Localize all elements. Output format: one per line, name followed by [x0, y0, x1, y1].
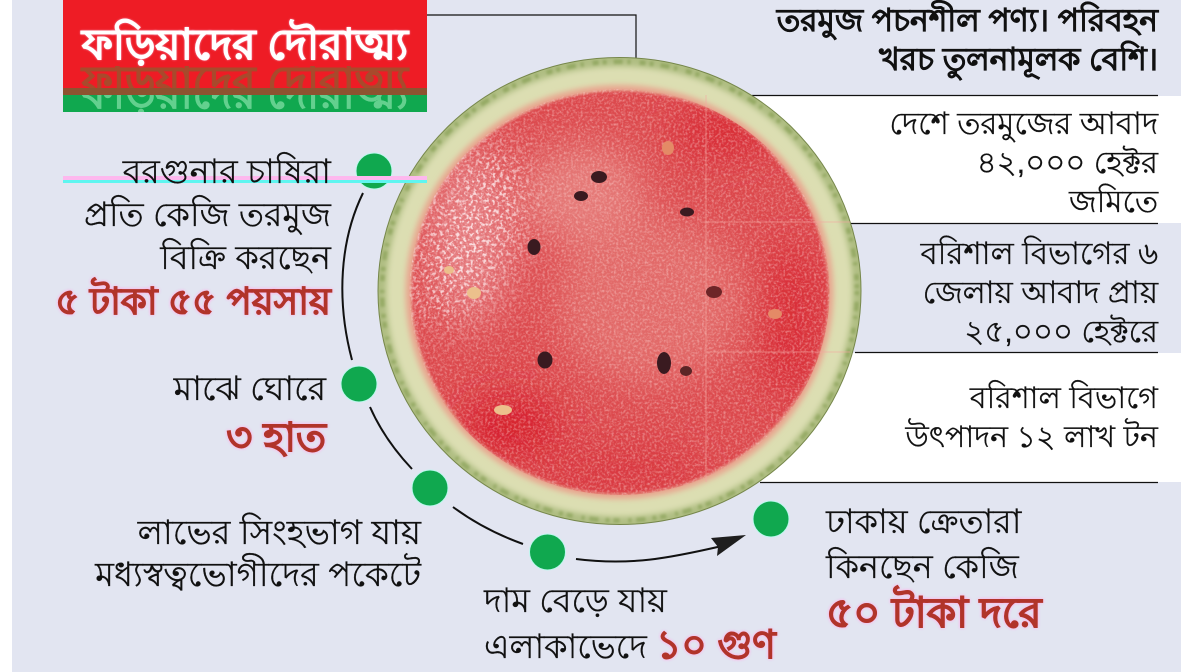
fact: Barishal cultivation: ২৫,০০০ হেক্টরে — [964, 314, 1158, 349]
step 5: Dhaka price: ৫০ টাকা দরে — [826, 589, 1042, 636]
pale speckles — [410, 120, 557, 357]
flesh — [406, 85, 834, 499]
step 3: middlemen profit: লাভের সিংহভাগ যায় — [138, 514, 421, 552]
step 4: price rise — [483, 583, 778, 667]
step 1: farmers' price: ৫ টাকা ৫৫ পয়সায় — [55, 280, 331, 322]
fact: national cultivation: জমিতে — [1069, 184, 1158, 219]
fact: national cultivation: ৪২,০০০ হেক্টর — [977, 145, 1158, 180]
step 4: price rise: দাম বেড়ে যায় — [484, 583, 667, 620]
decorative pink and cyan strip — [63, 176, 427, 180]
white band: production — [740, 353, 1181, 482]
fact: Barishal cultivation — [920, 235, 1159, 349]
print registration ghost lines — [706, 95, 850, 482]
step 1: farmers' price: বরগুনার চাষিরা — [123, 154, 331, 191]
fact: Barishal cultivation: জেলায় আবাদ প্রায় — [923, 275, 1158, 310]
step 3: middlemen profit: মধ্যস্বত্বভোগীদের পকেটে — [95, 556, 421, 594]
title banner — [63, 0, 427, 112]
rind — [378, 58, 861, 524]
rind green flecks — [382, 62, 856, 520]
leader lines — [427, 15, 1158, 482]
pale seeds — [444, 141, 782, 415]
top-right note: খরচ তুলনামূলক বেশি। — [879, 42, 1158, 77]
white band: national cultivation — [740, 96, 1181, 223]
fact: national cultivation — [889, 106, 1159, 219]
step 2: changes hands — [173, 371, 329, 460]
fact: Barishal cultivation: বরিশাল বিভাগের ৬ — [921, 236, 1158, 271]
diagram: connectors, watermelon and flow path — [340, 14, 1158, 570]
banner green stripe — [63, 95, 427, 112]
flesh shading — [400, 80, 840, 500]
top-right note: তরমুজ পচনশীল পণ্য। পরিবহন — [777, 3, 1158, 38]
step 5: Dhaka price: ঢাকায় ক্রেতারা — [826, 504, 1021, 541]
step 1: farmers' price: প্রতি কেজি তরমুজ — [84, 197, 331, 234]
step 4: price rise: এলাকাভেদে ১০ গুণ — [484, 624, 776, 667]
step 2: changes hands: মাঝে ঘোরে — [174, 371, 326, 408]
fact: national cultivation: দেশে তরমুজের আবাদ — [889, 106, 1158, 141]
flow path with arrow — [342, 193, 746, 562]
step 1: farmers' price: বিক্রি করছেন — [160, 240, 331, 277]
step 5: Dhaka price — [825, 504, 1044, 636]
arrowhead — [711, 535, 746, 556]
title text: ফড়িয়াদের দৌরাত্ম্য — [82, 22, 408, 69]
step 2: changes hands: ৩ হাত — [226, 416, 326, 460]
step 3: middlemen profit — [94, 512, 422, 594]
flow dots — [341, 153, 789, 570]
banner brown stripe — [63, 88, 427, 95]
fact: Barishal production: বরিশাল বিভাগে — [970, 382, 1158, 415]
step 5: Dhaka price: কিনছেন কেজি — [826, 549, 1019, 586]
title ghost print on red: ফড়িয়াদের দৌরাত্ম্য — [82, 59, 408, 106]
seeds — [528, 171, 722, 376]
pale inner rind — [386, 66, 852, 516]
top-right note — [776, 0, 1160, 81]
watermelon — [378, 58, 861, 524]
fact: Barishal production — [904, 380, 1158, 454]
fact: Barishal production: উৎপাদন ১২ লাখ টন — [905, 421, 1158, 454]
step 1: farmers' price — [55, 152, 334, 322]
